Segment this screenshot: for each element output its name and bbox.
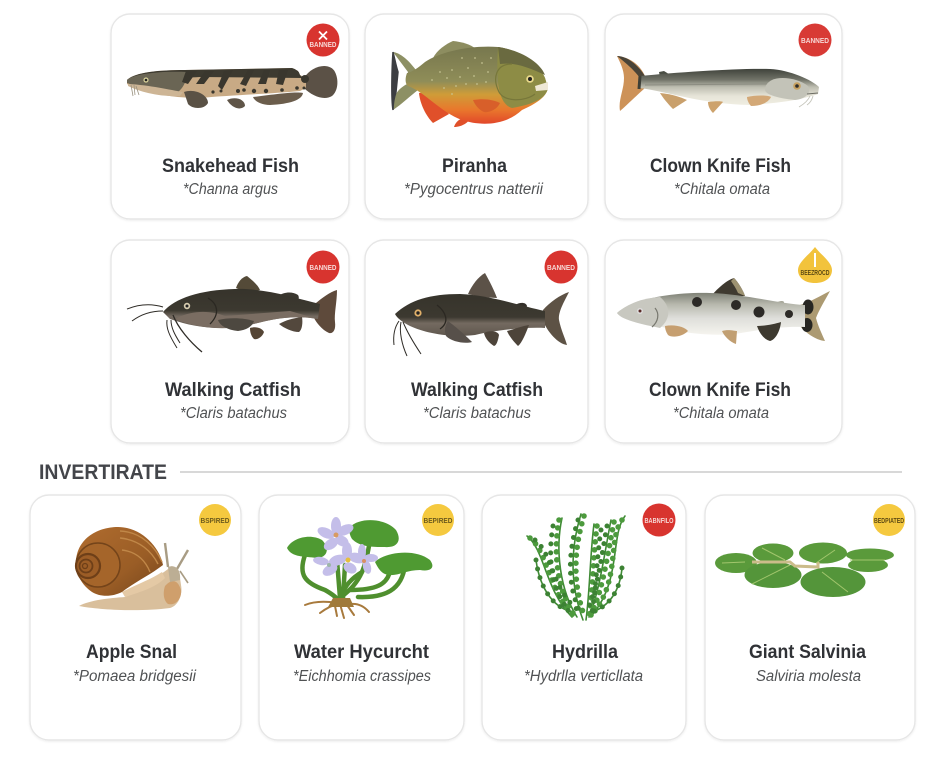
scientific name: Chitala omata: *Chitala omata [674, 181, 770, 198]
heading: Invertirate: INVERTIRATE [39, 461, 167, 484]
badge: yellow [873, 504, 905, 536]
icon: piranha [392, 41, 548, 127]
icon: snakehead fish [127, 66, 337, 108]
scientific name: Claris batachus: *Claris batachus [423, 405, 531, 422]
badge: banned [306, 24, 340, 56]
icon: water hyacinth [287, 517, 432, 618]
icon: clown knife fish [617, 56, 819, 113]
badge: banned [798, 24, 832, 56]
icon: giant salvinia [715, 542, 894, 597]
badge: banned: BANNED [547, 265, 575, 272]
name: Clown Knife Fish: Clown Knife Fish [649, 380, 791, 401]
badge: warning drop [798, 247, 832, 283]
badge: warning drop: BEEZROCD [800, 270, 830, 277]
panel: Water Hyacinth [259, 495, 464, 740]
name: Clown Knife Fish: Clown Knife Fish [650, 156, 791, 177]
badge: banned [306, 250, 340, 284]
scientific name: Salviria molesta: Salviria molesta [756, 668, 861, 685]
scientific name: Eichhomia crassipes: *Eichhomia crassipes [293, 668, 431, 685]
scientific name: Hydrlla verticllata: *Hydrlla verticllata [524, 668, 643, 685]
badge: banned [642, 504, 676, 536]
badge: yellow: BEDPIATED [874, 518, 904, 525]
name: Apple Snal: Apple Snal [86, 642, 177, 663]
panel: Walking Catfish 2 [365, 240, 588, 443]
name: Snakehead Fish: Snakehead Fish [162, 156, 299, 177]
panel: Apple Snail [30, 495, 241, 740]
name: Piranha: Piranha [442, 156, 507, 177]
panel: Piranha [365, 14, 588, 219]
badge: banned: BANNED [310, 42, 336, 49]
icon: spotted clown knife fish [617, 278, 830, 344]
scientific name: Chitala omata: *Chitala omata [673, 405, 769, 422]
panel: Hydrilla [482, 495, 686, 740]
badge: yellow [199, 504, 231, 536]
panel: Clown Knife Fish (restricted) [605, 240, 842, 443]
scientific name: Channa argus: *Channa argus [183, 181, 278, 198]
icon: walking catfish [127, 276, 337, 352]
badge: banned [544, 250, 578, 284]
panel: Giant Salvinia [705, 495, 915, 740]
badge: yellow [422, 504, 454, 536]
name: Walking Catfish: Walking Catfish [411, 380, 543, 401]
panel: Snakehead Fish [111, 14, 349, 219]
scientific name: Pomaea bridgesii: *Pomaea bridgesii [73, 668, 197, 685]
name: Hydrilla: Hydrilla [552, 642, 618, 663]
name: Walking Catfish: Walking Catfish [165, 380, 301, 401]
scientific name: Claris batachus: *Claris batachus [180, 405, 287, 422]
scientific name: Pygocentrus natterii: *Pygocentrus natterii [404, 181, 544, 198]
badge: banned: BANNED [310, 265, 336, 272]
name: Giant Salvinia: Giant Salvinia [749, 642, 866, 663]
badge: banned: BABNFILO [644, 518, 674, 525]
icon: snail [76, 527, 188, 610]
panel: Walking Catfish 1 [111, 240, 349, 443]
panel: Clown Knife Fish (banned) [605, 14, 842, 219]
name: Water Hycurcht: Water Hycurcht [294, 642, 430, 663]
badge: yellow: BEPIRED [424, 518, 452, 525]
badge: banned: BANNED [801, 38, 829, 45]
icon: walking catfish [394, 273, 569, 356]
icon: hydrilla [527, 514, 625, 620]
badge: yellow: BSPIRED [200, 518, 230, 525]
